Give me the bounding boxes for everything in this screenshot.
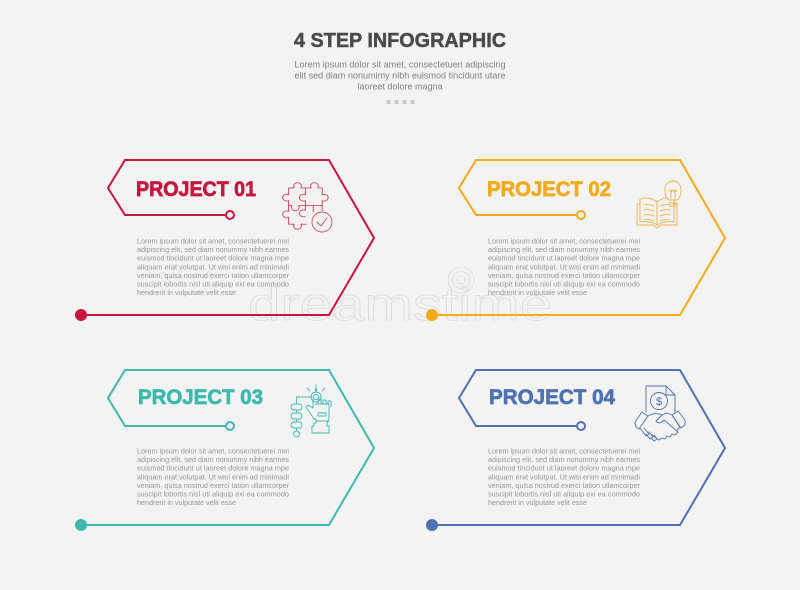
icon: handshake and dollar document: $	[656, 396, 662, 408]
body text: hendrerit in vulputate velit esse	[137, 498, 236, 507]
outline arrow	[432, 370, 725, 525]
end ring	[226, 211, 234, 219]
body text: aliquam erat volutpat. Ut wisi enim ad minimadi	[488, 262, 640, 271]
body text: aliquam erat volutpat. Ut wisi enim ad minimadi	[137, 472, 289, 481]
heading: PROJECT 02	[487, 178, 611, 201]
body text: aliquam erat volutpat. Ut wisi enim ad minimadi	[137, 262, 289, 271]
end ring	[226, 422, 234, 430]
panel: project 01	[75, 160, 374, 321]
end ring	[577, 422, 585, 430]
body text	[137, 446, 290, 507]
title: 4 STEP INFOGRAPHIC	[294, 29, 506, 52]
pagination dots	[386, 100, 414, 104]
body text: veniam, quisa nostrud exerci tation ullamcorper	[488, 271, 641, 280]
body text: hendrerit in vulputate velit esse	[488, 498, 587, 507]
body text: adipiscing elit, sed diam nonummy nibh earmes	[137, 245, 289, 254]
heading: PROJECT 03	[138, 386, 263, 409]
body text: veniam, quisa nostrud exerci tation ullamcorper	[488, 481, 641, 490]
outline arrow	[81, 370, 374, 525]
start dot	[75, 519, 87, 531]
body text: adipiscing elit, sed diam nonummy nibh earmes	[137, 455, 289, 464]
body text	[488, 236, 641, 297]
start dot	[426, 519, 438, 531]
body text: Lorem ipsum dolor sit amet, consectetuerei mei	[488, 236, 640, 246]
body text: euismod tincidunt ut laoreet dolore magna mpe	[137, 254, 289, 263]
body text: hendrerit in vulputate velit esse	[488, 288, 587, 297]
outline arrow	[81, 160, 374, 315]
panel: project 02	[426, 160, 725, 321]
heading: PROJECT 04	[489, 386, 615, 409]
end ring	[577, 211, 585, 219]
body text: adipiscing elit, sed diam nonummy nibh earmes	[488, 245, 640, 254]
panel: project 03	[75, 370, 374, 531]
icon: puzzle with check	[283, 183, 332, 232]
icon: open book with bulb	[637, 181, 681, 228]
body text: suscipit lobortis nisl uti aliquip exi ea commodo	[137, 490, 289, 498]
body text: suscipit lobortis nisl uti aliquip exi ea commodo	[137, 280, 289, 288]
body text: adipiscing elit, sed diam nonummy nibh earmes	[488, 455, 640, 464]
heading: PROJECT 01	[136, 178, 256, 201]
body text: suscipit lobortis nisl uti aliquip exi ea commodo	[488, 280, 640, 288]
body text: veniam, quisa nostrud exerci tation ullamcorper	[137, 271, 290, 280]
body text: Lorem ipsum dolor sit amet, consectetuerei mei	[137, 446, 289, 456]
body text	[488, 446, 641, 507]
body text: Lorem ipsum dolor sit amet, consectetuerei mei	[137, 236, 289, 246]
watermark	[248, 267, 552, 330]
subtitle text block	[294, 60, 506, 92]
body text: Lorem ipsum dolor sit amet, consectetuerei mei	[488, 446, 640, 456]
body text: euismod tincidunt ut laoreet dolore magna mpe	[488, 464, 640, 473]
subtitle text block: Lorem ipsum dolor sit amet, consectetueri adipiscing	[294, 60, 506, 70]
body text: suscipit lobortis nisl uti aliquip exi ea commodo	[488, 490, 640, 498]
body text	[137, 236, 290, 297]
start dot	[75, 309, 87, 321]
start dot	[426, 309, 438, 321]
body text: aliquam erat volutpat. Ut wisi enim ad minimadi	[488, 472, 640, 481]
panel: project 04	[426, 370, 725, 531]
body text: euismod tincidunt ut laoreet dolore magna mpe	[488, 254, 640, 263]
subtitle text block: laoreet dolore magna	[358, 82, 443, 92]
body text: euismod tincidunt ut laoreet dolore magna mpe	[137, 464, 289, 473]
body text: veniam, quisa nostrud exerci tation ullamcorper	[137, 481, 290, 490]
watermark: dreamstime	[248, 278, 552, 330]
subtitle text block: elit sed diam nonumimy nibh euismod tincidunt utare	[294, 70, 506, 80]
body text: hendrerit in vulputate velit esse	[137, 288, 236, 297]
outline arrow	[432, 160, 725, 315]
icon: robot hand and flowchart	[291, 385, 331, 437]
icon: handshake and dollar document	[635, 386, 685, 441]
